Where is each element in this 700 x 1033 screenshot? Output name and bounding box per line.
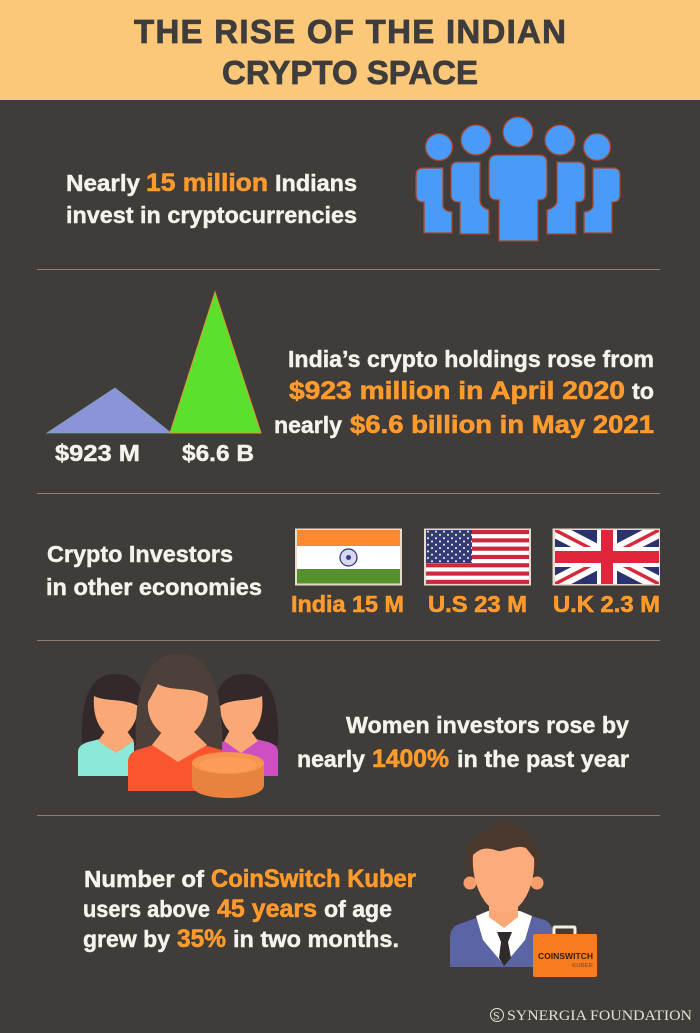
text: women investors: in the past year (457, 746, 629, 772)
text: holdings rose: $923 million in April 2020 (289, 377, 625, 405)
text: women investors: Women investors rose by (346, 712, 629, 738)
text: women investors: 1400% (372, 745, 449, 773)
ears (464, 876, 476, 890)
text: 15 million Indians invest (66, 169, 357, 228)
left woman (78, 674, 144, 776)
text: CoinSwitch Kuber users: 45 years (217, 895, 317, 923)
flag: India (295, 528, 402, 586)
logo: Synergia Foundation: S (493, 1008, 500, 1022)
text: CoinSwitch Kuber users: in two months. (233, 926, 399, 952)
briefcase (533, 927, 597, 977)
text: CoinSwitch Kuber users: 35% (177, 925, 226, 953)
text: holdings rose: India’s crypto holdings rose from (288, 346, 654, 372)
text: CoinSwitch Kuber users: Number of (84, 866, 204, 892)
text: CoinSwitch Kuber users: users above (83, 896, 210, 922)
coin (192, 752, 264, 798)
text: holdings rose (274, 346, 654, 439)
right woman (216, 674, 278, 776)
text: 15 million Indians invest: invest in cryptocurrencies (66, 202, 357, 228)
text: CoinSwitch Kuber users (83, 865, 416, 953)
flag: United States (424, 528, 531, 586)
text: women investors (297, 712, 629, 773)
briefcase: KUBER (572, 963, 593, 969)
flag labels: U.S 23 M (428, 591, 527, 617)
text: women investors: nearly (297, 746, 365, 772)
text: holdings rose: to (632, 378, 654, 404)
neck (489, 905, 518, 928)
text: 15 million Indians invest: Indians (275, 170, 357, 196)
triangle chart: holdings growth: $6.6 B (182, 440, 254, 466)
text: holdings rose: $6.6 billion in May 2021 (350, 411, 654, 439)
text: crypto investors in other economies: Crypto Investors (47, 541, 233, 567)
briefcase: COINSWITCH (538, 951, 593, 961)
text: 15 million Indians invest: 15 million (146, 169, 268, 197)
flag: United Kingdom (552, 528, 660, 586)
text: crypto investors in other economies: in other economies (46, 574, 262, 600)
text: crypto investors in other economies (46, 541, 262, 600)
text: CoinSwitch Kuber users: CoinSwitch Kuber (211, 865, 416, 893)
face (473, 847, 534, 913)
center woman (128, 654, 222, 791)
icon: man with CoinSwitch briefcase (450, 822, 597, 977)
text: 15 million Indians invest: Nearly (66, 170, 140, 196)
text: CoinSwitch Kuber users: grew by (83, 926, 170, 952)
text: CoinSwitch Kuber users: of age (324, 896, 392, 922)
icon: group of people (416, 117, 620, 241)
triangle chart: holdings growth (47, 292, 261, 466)
title banner (0, 0, 700, 100)
shirt (476, 911, 532, 965)
logo: Synergia Foundation: SYNERGIA FOUNDATION (507, 1008, 692, 1024)
flag labels (291, 591, 660, 617)
jacket (450, 913, 553, 967)
title banner: THE RISE OF THE INDIAN (134, 13, 566, 50)
flag labels: India 15 M (291, 591, 404, 617)
title banner: CRYPTO SPACE (222, 54, 478, 91)
icon: women investors with coin (78, 654, 278, 798)
tie (497, 932, 512, 966)
triangle chart: holdings growth: $923 M (55, 440, 140, 466)
text: holdings rose: nearly (274, 412, 342, 438)
hair (466, 822, 538, 880)
flag labels: U.K 2.3 M (553, 591, 660, 617)
